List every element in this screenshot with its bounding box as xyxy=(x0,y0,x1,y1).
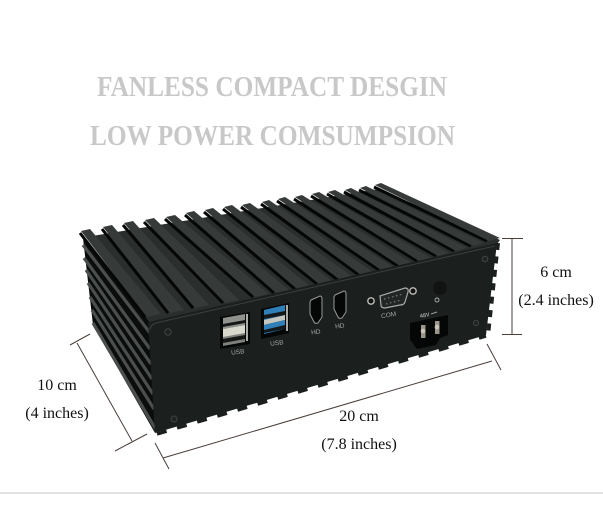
48V power terminal block: 48V xyxy=(419,312,430,320)
dimension: depth 10 cm: (4 inches) xyxy=(25,405,89,422)
title xyxy=(90,72,455,152)
title: LOW POWER COMSUMPSION xyxy=(90,121,455,152)
USB port pair, blue: USB xyxy=(270,339,284,348)
USB port pair, blue xyxy=(261,303,289,348)
HDMI port 1 xyxy=(310,296,322,336)
dimension: height 6 cm xyxy=(502,238,594,334)
dimension: depth 10 cm: 10 cm xyxy=(37,377,77,394)
COM serial port: COM xyxy=(381,311,397,320)
front panel xyxy=(148,243,498,434)
COM serial port xyxy=(368,288,416,320)
device: fanless mini PC xyxy=(80,183,500,434)
USB port pair, silver: USB xyxy=(231,348,245,357)
HDMI port 2 xyxy=(334,291,346,330)
HDMI port 1: HD xyxy=(311,329,321,336)
dimension: depth 10 cm xyxy=(25,334,147,451)
dimension: width 20 cm: 20 cm xyxy=(339,408,379,425)
top heat sink ridges xyxy=(80,183,500,323)
left side fins xyxy=(83,238,155,433)
dimension: width 20 cm xyxy=(155,344,501,469)
dimension: width 20 cm: (7.8 inches) xyxy=(321,436,397,453)
dimension: height 6 cm: 6 cm xyxy=(540,264,572,281)
USB port pair, silver xyxy=(220,312,250,357)
title: FANLESS COMPACT DESGIN xyxy=(97,72,447,103)
dimension: height 6 cm: (2.4 inches) xyxy=(518,292,594,309)
footer divider xyxy=(0,492,603,494)
power button xyxy=(433,281,447,302)
48V power terminal block xyxy=(410,312,448,349)
HDMI port 2: HD xyxy=(335,323,345,330)
